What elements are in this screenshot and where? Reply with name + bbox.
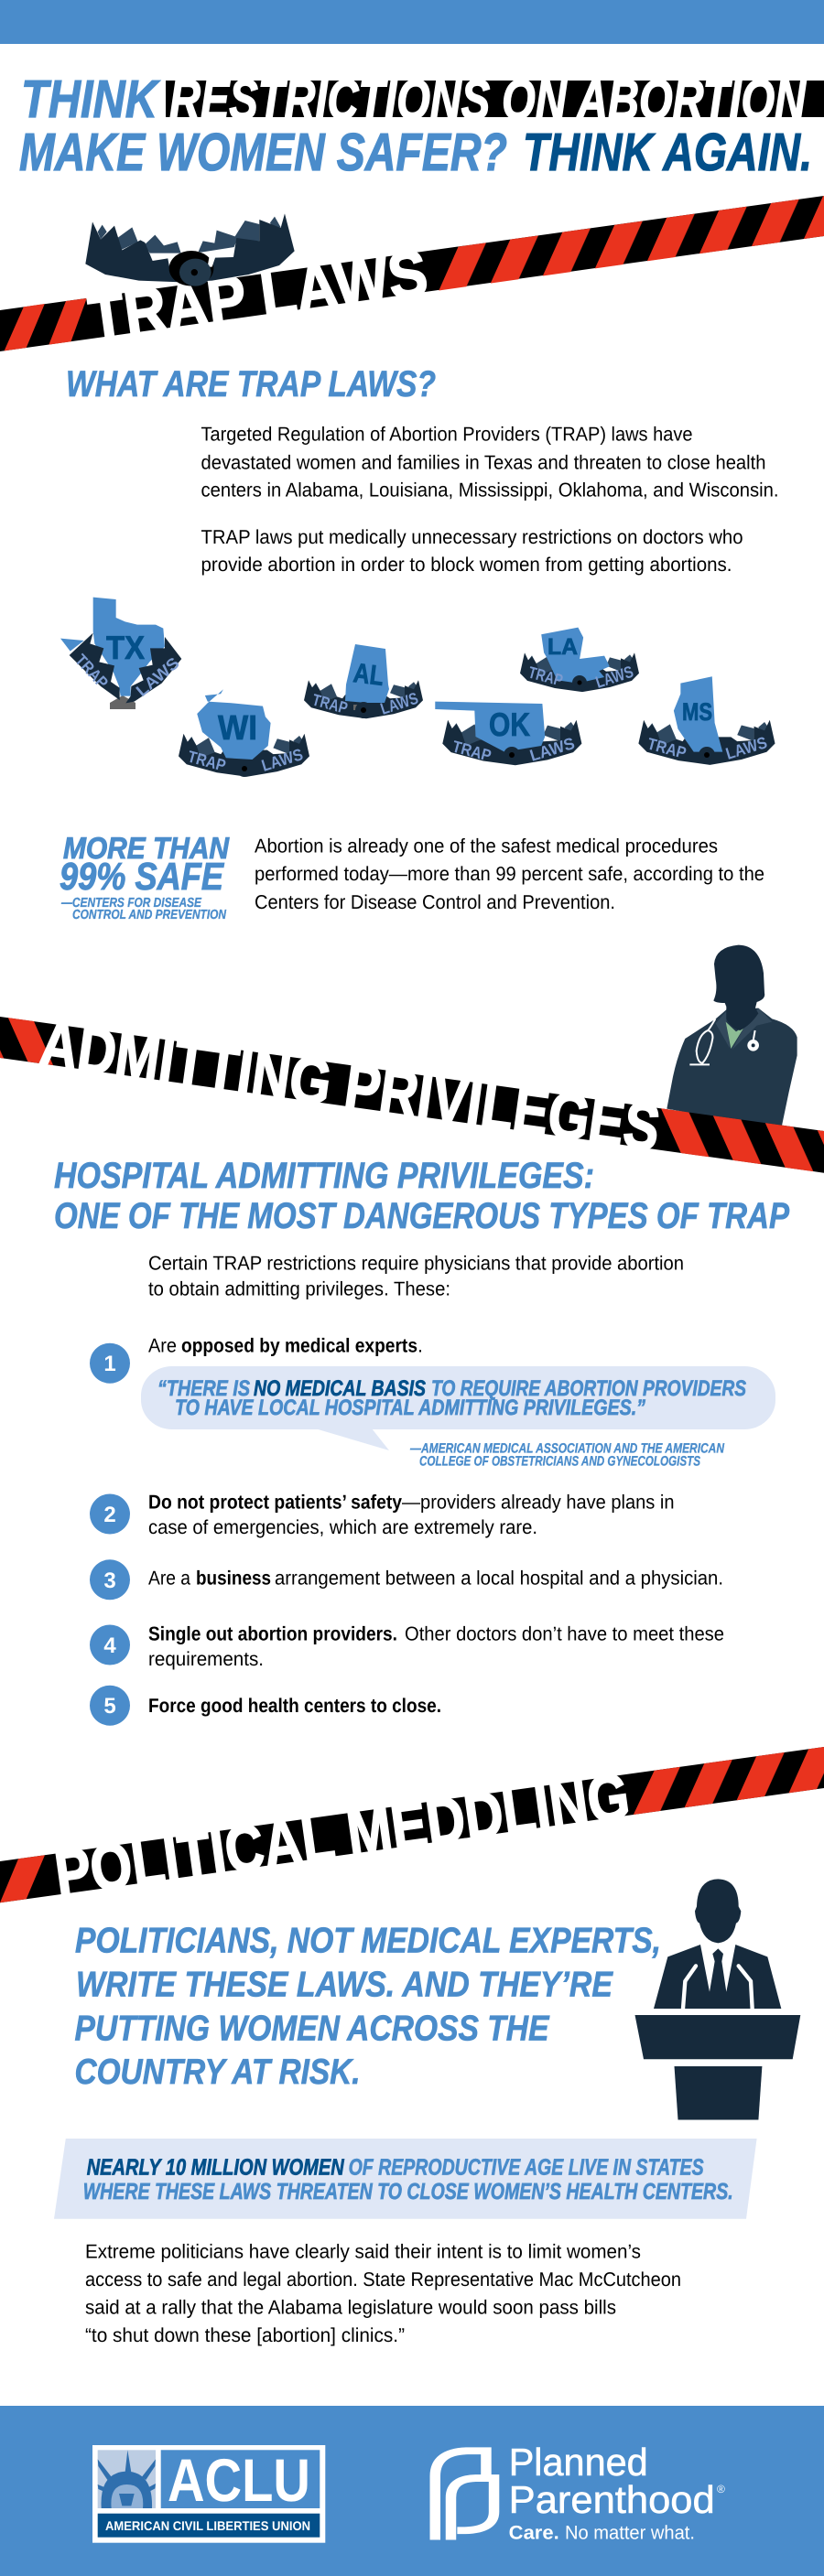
icon: Oklahoma in trap: OK bbox=[489, 706, 530, 743]
list item 3 bbox=[90, 1559, 723, 1600]
callout: quote bubble: TO HAVE LOCAL HOSPITAL ADMITTING PRIVILEGES.” bbox=[175, 1396, 645, 1420]
icon: Wisconsin in trap: WI bbox=[218, 709, 257, 748]
logo: Planned Parenthood: ® bbox=[717, 2483, 725, 2495]
list item 4: requirements. bbox=[148, 1648, 264, 1670]
list item 2: case of emergencies, which are extremely rare. bbox=[148, 1516, 537, 1538]
list item 3: arrangement between a local hospital and a physician. bbox=[275, 1568, 723, 1590]
icon: Louisiana in trap bbox=[520, 628, 639, 692]
callout: quote bubble: NO MEDICAL BASIS bbox=[254, 1376, 426, 1401]
text block: extreme politicians: Extreme politicians have clearly said their intent is to limit women’s bbox=[85, 2240, 641, 2262]
icon: politician at podium bbox=[635, 1879, 800, 2119]
text block: extreme politicians: “to shut down these [abortion] clinics.” bbox=[85, 2324, 405, 2346]
list item 2: Do not protect patients’ safety bbox=[148, 1491, 402, 1513]
heading: what are TRAP laws: WHAT ARE TRAP LAWS? bbox=[66, 364, 436, 404]
list item 2 bbox=[90, 1491, 674, 1538]
icon: Mississippi in trap: TRAP bbox=[645, 735, 688, 762]
tape: ADMITTING PRIVILEGES: ADMITTING PRIVILEGES bbox=[36, 1008, 664, 1166]
heading: politicians write these laws: POLITICIANS, NOT MEDICAL EXPERTS, bbox=[75, 1921, 661, 1960]
icon: Wisconsin in trap: TRAP bbox=[186, 748, 228, 775]
callout: nearly 10 million women bbox=[54, 2139, 757, 2219]
icon: Louisiana in trap: TRAP bbox=[526, 663, 565, 690]
list item 4: Other doctors don’t have to meet these bbox=[405, 1623, 724, 1645]
title: MAKE WOMEN SAFER? bbox=[19, 123, 507, 182]
icon: Oklahoma in trap: LAWS bbox=[527, 734, 577, 765]
list item 1: Are bbox=[148, 1335, 177, 1357]
icon: Wisconsin in trap: LAWS bbox=[259, 745, 305, 775]
icon: Alabama in trap bbox=[304, 644, 423, 718]
logo: ACLU: AMERICAN CIVIL LIBERTIES UNION bbox=[105, 2518, 310, 2533]
text block: safety bbox=[255, 835, 764, 913]
tape: POLITICAL MEDDLING: POLITICAL MEDDLING bbox=[50, 1760, 634, 1912]
icon: Alabama in trap: LAWS bbox=[378, 689, 420, 718]
list item 5: 5 bbox=[103, 1694, 116, 1719]
icon: Alabama in trap: TRAP bbox=[310, 691, 350, 717]
heading: hospital admitting privileges: HOSPITAL ADMITTING PRIVILEGES: bbox=[54, 1156, 594, 1196]
quote attribution bbox=[409, 1440, 725, 1470]
list item 4 bbox=[90, 1623, 724, 1670]
quote attribution: —AMERICAN MEDICAL ASSOCIATION AND THE AMERICAN bbox=[409, 1440, 725, 1456]
icon: Texas in trap: TX bbox=[106, 629, 145, 666]
title: THINK bbox=[21, 70, 160, 129]
icon: Texas in trap bbox=[60, 598, 183, 709]
callout: more than 99% safe: CONTROL AND PREVENTION bbox=[72, 908, 226, 922]
tape: TRAP LAWS: TRAP LAWS bbox=[84, 236, 432, 356]
callout: quote bubble: “THERE IS bbox=[157, 1376, 250, 1401]
icon: Mississippi in trap: LAWS bbox=[723, 733, 769, 763]
top bar bbox=[0, 0, 824, 44]
text block: TRAP definition: centers in Alabama, Louisiana, Mississippi, Oklahoma, and Wisconsin. bbox=[201, 480, 778, 501]
tape: TRAP LAWS bbox=[0, 196, 824, 356]
list item 2: —providers already have plans in bbox=[402, 1491, 674, 1513]
list item 4: Single out abortion providers. bbox=[148, 1623, 397, 1645]
text block: admitting privileges intro: Certain TRAP restrictions require physicians that provide abortion bbox=[148, 1253, 684, 1275]
callout: more than 99% safe: —CENTERS FOR DISEASE bbox=[60, 896, 202, 911]
heading: hospital admitting privileges bbox=[54, 1156, 789, 1236]
icon: bear trap bbox=[85, 213, 295, 286]
icon: Alabama in trap: AL bbox=[352, 658, 385, 692]
text block: TRAP definition bbox=[201, 424, 778, 576]
icon: Texas in trap: LAWS bbox=[133, 653, 183, 700]
icon: doctor bbox=[667, 945, 797, 1128]
logo: Planned Parenthood: No matter what. bbox=[565, 2522, 695, 2544]
text block: TRAP definition: provide abortion in order to block women from getting abortions. bbox=[201, 554, 732, 576]
text block: safety: Abortion is already one of the safest medical procedures bbox=[255, 835, 718, 857]
callout: nearly 10 million women: NEARLY 10 MILLION WOMEN bbox=[87, 2154, 344, 2180]
text block: safety: performed today—more than 99 percent safe, according to the bbox=[255, 863, 764, 885]
callout: more than 99% safe: 99% SAFE bbox=[60, 855, 225, 898]
text block: TRAP definition: TRAP laws put medically unnecessary restrictions on doctors who bbox=[201, 526, 743, 548]
list item 3: business bbox=[196, 1568, 271, 1590]
logo: Planned Parenthood: Parenthood bbox=[509, 2478, 715, 2521]
list item 4: 4 bbox=[103, 1633, 116, 1658]
icon: Louisiana in trap: LAWS bbox=[593, 663, 635, 692]
text block: admitting privileges intro: to obtain admitting privileges. These: bbox=[148, 1278, 450, 1300]
logo: ACLU: ACLU bbox=[168, 2446, 310, 2514]
logo: Planned Parenthood bbox=[435, 2441, 725, 2544]
title bbox=[19, 69, 824, 182]
heading: politicians write these laws: COUNTRY AT RISK. bbox=[75, 2053, 361, 2092]
text block: admitting privileges intro bbox=[148, 1253, 684, 1300]
icon: Wisconsin in trap bbox=[179, 689, 309, 777]
list item 1: . bbox=[417, 1335, 423, 1357]
heading: politicians write these laws: WRITE THESE LAWS. AND THEY’RE bbox=[76, 1966, 613, 2005]
text block: TRAP definition: devastated women and families in Texas and threaten to close health bbox=[201, 451, 765, 473]
list item 5 bbox=[90, 1686, 441, 1726]
list item 1 bbox=[90, 1335, 423, 1384]
callout: more than 99% safe: MORE THAN bbox=[63, 831, 230, 865]
callout: quote bubble: TO REQUIRE ABORTION PROVIDERS bbox=[431, 1376, 746, 1401]
logo: Planned Parenthood: Care. bbox=[509, 2522, 559, 2544]
callout: more than 99% safe bbox=[60, 831, 230, 922]
logo: Planned Parenthood: Planned bbox=[509, 2441, 648, 2484]
icon: Louisiana in trap: LA bbox=[548, 634, 578, 660]
quote attribution: COLLEGE OF OBSTETRICIANS AND GYNECOLOGISTS bbox=[419, 1454, 700, 1470]
text block: extreme politicians bbox=[85, 2240, 681, 2346]
list item 3: 3 bbox=[103, 1568, 116, 1593]
list item 1: opposed by medical experts bbox=[181, 1335, 417, 1357]
icon: Texas in trap: TRAP bbox=[71, 651, 112, 692]
text block: TRAP definition: Targeted Regulation of Abortion Providers (TRAP) laws have bbox=[201, 424, 692, 446]
icon: Mississippi in trap bbox=[638, 676, 775, 765]
list item 3: Are a bbox=[148, 1568, 190, 1590]
icon: Oklahoma in trap: TRAP bbox=[450, 738, 493, 765]
icon: Oklahoma in trap bbox=[435, 702, 581, 765]
callout: nearly 10 million women: OF REPRODUCTIVE AGE LIVE IN STATES bbox=[349, 2154, 704, 2180]
text block: extreme politicians: access to safe and legal abortion. State Representative Mac McCutcheon bbox=[85, 2269, 681, 2290]
footer bar bbox=[0, 2406, 824, 2576]
list item 5: Force good health centers to close. bbox=[148, 1695, 441, 1717]
list item 1: 1 bbox=[103, 1352, 116, 1376]
text block: extreme politicians: said at a rally that the Alabama legislature would soon pass bills bbox=[85, 2297, 616, 2319]
text block: safety: Centers for Disease Control and Prevention. bbox=[255, 891, 615, 913]
icon: Mississippi in trap: MS bbox=[682, 698, 712, 726]
heading: politicians write these laws: PUTTING WOMEN ACROSS THE bbox=[75, 2009, 549, 2048]
heading: politicians write these laws bbox=[75, 1921, 661, 2092]
logo: ACLU bbox=[92, 2445, 325, 2543]
callout: quote bubble bbox=[141, 1366, 775, 1450]
list item 2: 2 bbox=[103, 1503, 116, 1527]
